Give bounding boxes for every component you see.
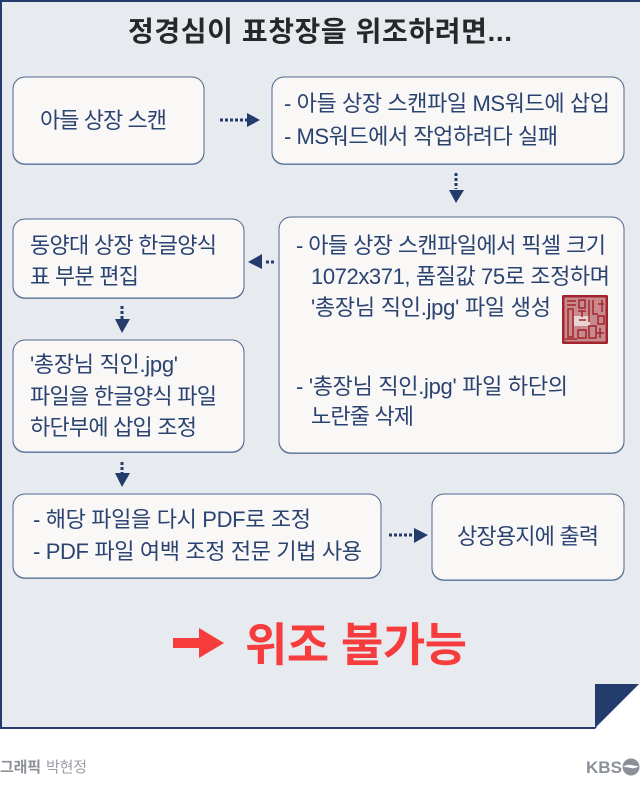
- box: pdf: [12, 494, 382, 579]
- box: word edit: - MS워드에서 작업하려다 실패: [284, 124, 558, 149]
- box: scan: [12, 77, 204, 165]
- credit: [0, 759, 87, 776]
- box: table edit: 표 부분 편집: [30, 264, 139, 289]
- box: print: [432, 494, 624, 581]
- title: 정경심이 표창장을 위조하려면...: [128, 16, 512, 47]
- logo: KBS: KBS: [586, 758, 622, 777]
- box: pixel edit: 노란줄 삭제: [311, 404, 414, 429]
- box: pdf: - PDF 파일 여백 조정 전문 기법 사용: [33, 539, 362, 564]
- credit: 그래픽: [0, 759, 41, 776]
- page fold corner: [595, 684, 640, 729]
- arrow: pixel edit to table edit: [248, 254, 274, 269]
- conclusion: 위조 불가능: [245, 619, 467, 671]
- arrow: table edit to insert: [115, 306, 130, 333]
- arrow: pdf to print: [389, 528, 428, 543]
- box: insert: 파일을 한글양식 파일: [30, 384, 217, 409]
- arrow: red result: [173, 628, 224, 658]
- box: insert: '총장님 직인.jpg': [30, 352, 178, 377]
- arrow: insert to pdf: [115, 462, 130, 487]
- arrow: scan to word: [220, 113, 260, 127]
- box: table edit: 동양대 상장 한글양식: [30, 233, 217, 258]
- arrow: word to pixel edit: [449, 173, 464, 203]
- logo: KBS: [586, 758, 640, 777]
- icon: red seal: [562, 295, 608, 344]
- box: word edit: - 아들 상장 스캔파일 MS워드에 삽입: [284, 91, 610, 116]
- box: scan: 아들 상장 스캔: [40, 108, 167, 133]
- box: pixel edit: [278, 217, 624, 454]
- box: print: 상장용지에 출력: [457, 524, 599, 549]
- box: pixel edit: 1072x371, 품질값 75로 조정하며: [311, 264, 610, 289]
- box: pdf: - 해당 파일을 다시 PDF로 조정: [33, 507, 311, 532]
- box: word edit: [272, 77, 624, 165]
- box: pixel edit: - '총장님 직인.jpg' 파일 하단의: [296, 374, 568, 399]
- credit: 박현정: [46, 759, 87, 776]
- box: table edit: [12, 219, 244, 299]
- box: insert: [12, 340, 244, 453]
- box: pixel edit: '총장님 직인.jpg' 파일 생성: [311, 295, 551, 320]
- box: insert: 하단부에 삽입 조정: [30, 415, 197, 440]
- box: pixel edit: - 아들 상장 스캔파일에서 픽셀 크기: [296, 233, 606, 258]
